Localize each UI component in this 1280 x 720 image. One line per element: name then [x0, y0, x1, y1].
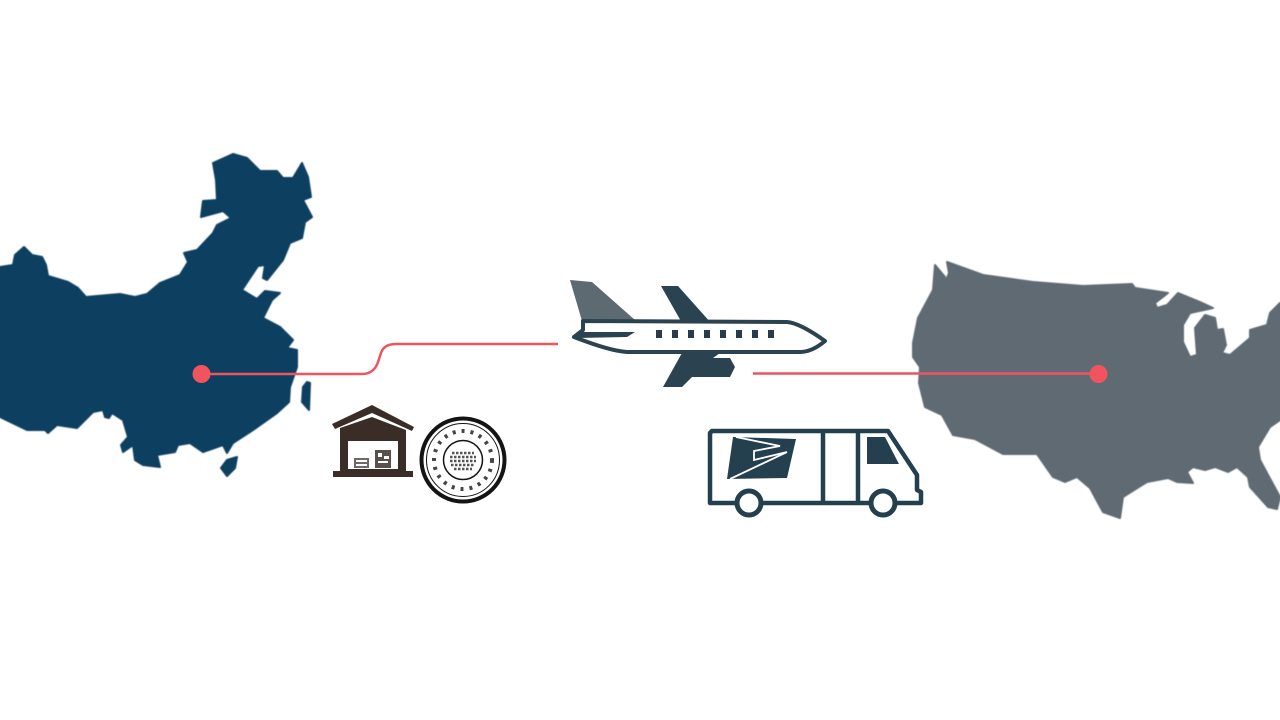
origin marker	[192, 365, 210, 383]
island: Hainan	[221, 457, 237, 476]
plane windows	[656, 330, 774, 338]
plane upper wing	[661, 286, 711, 323]
truck rear wheel	[737, 491, 761, 515]
truck front wheel	[871, 491, 895, 515]
plane tail	[570, 280, 635, 321]
truck window	[867, 437, 899, 464]
plane lower wing	[663, 353, 735, 387]
destination marker	[1090, 365, 1108, 383]
route line: China to plane	[202, 344, 558, 374]
plane fuselage	[574, 321, 825, 352]
icon: warehouse	[332, 405, 414, 477]
icon: customs stamp	[422, 418, 504, 502]
icon: postal truck	[710, 431, 921, 515]
map: United States	[913, 262, 1280, 518]
truck dividers	[823, 431, 858, 503]
route line: plane to United States	[753, 372, 1098, 375]
truck body	[710, 431, 921, 503]
plane stripe	[577, 332, 635, 338]
island: Taiwan	[302, 382, 310, 410]
icon: airplane	[570, 280, 825, 387]
truck logo	[727, 437, 796, 479]
map: China	[0, 154, 312, 476]
